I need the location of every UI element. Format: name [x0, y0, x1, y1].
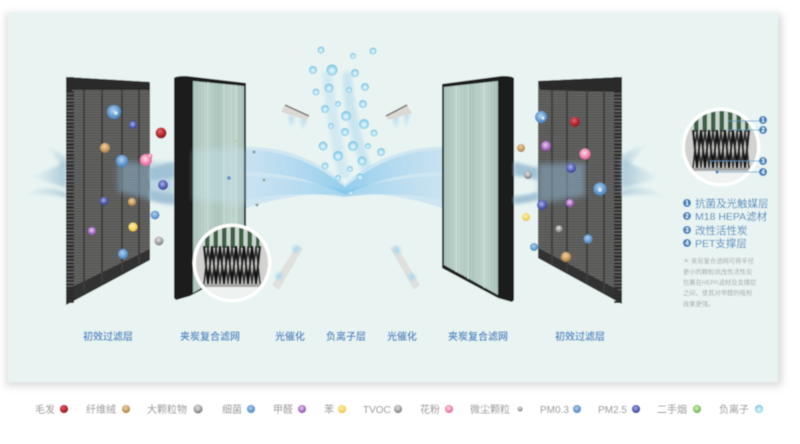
labels: layer names: 负离子层	[326, 330, 366, 343]
legend: particle types: 微尘颗粒	[470, 403, 510, 416]
icon: right pleat cross-section with callouts	[682, 108, 767, 186]
text block: note: ＊ 夹炭复合滤网可将半径	[683, 256, 755, 265]
airflow: right outlet tails	[622, 144, 668, 198]
filter: left primary mesh	[66, 77, 174, 305]
legend: particle types: 毛发	[35, 403, 55, 416]
legend list: filter layers	[683, 197, 768, 250]
text block: note: 效果更强。	[683, 299, 714, 308]
particles: small in left composite	[227, 140, 266, 206]
labels: layer names: 光催化	[387, 330, 417, 343]
text block: note: 更小的颗粒状改性活性炭	[683, 267, 753, 276]
airflow: central wave	[246, 147, 442, 208]
legend: particle types: 苯	[324, 403, 334, 416]
legend list: filter layers: PET支撑层	[695, 237, 747, 250]
legend: particle types: 细菌	[222, 403, 242, 416]
legend: particle types: TVOC	[363, 405, 391, 416]
particles: left side	[88, 105, 168, 259]
icon: upper left photocatalyst lamp	[281, 105, 309, 129]
legend: particle types: 花粉	[420, 403, 440, 416]
legend: particle types: 大颗粒物	[147, 403, 187, 416]
legend: particle types: 纤维绒	[86, 403, 116, 416]
filter: left composite with carbon	[174, 76, 246, 300]
legend list: filter layers: 1	[685, 201, 689, 207]
icon: left pleat cross-section	[192, 224, 272, 302]
text block: note: 包裹在HEPA滤材及支撑层	[683, 278, 756, 286]
legend: particle types: 甲醛	[273, 403, 293, 416]
legend list: filter layers: 抗菌及光触媒层	[695, 197, 768, 210]
legend: particle types: PM0.3	[540, 405, 569, 416]
filter: right composite with carbon	[442, 76, 514, 302]
icon: lower left photocatalyst lamp	[272, 245, 303, 290]
icon: right pleat cross-section with callouts: 3	[761, 159, 765, 165]
legend: particle types: PM2.5	[598, 405, 627, 416]
legend list: filter layers: 4	[685, 241, 689, 247]
airflow: band between left filters	[150, 162, 174, 204]
text block: note: 之间，使其对甲醛的吸附	[683, 288, 753, 297]
airflow: band between right filters	[514, 162, 538, 204]
icon: upper right photocatalyst lamp	[386, 105, 412, 129]
icon: right pleat cross-section with callouts: 1	[761, 118, 765, 124]
legend list: filter layers: 改性活性炭	[695, 224, 748, 237]
legend: particle types: 二手烟	[657, 403, 687, 416]
icon: lower right photocatalyst lamp	[390, 245, 420, 290]
legend: particle types: 负离子	[719, 403, 749, 416]
legend: particle types	[35, 403, 763, 416]
airflow: vertical stream	[322, 72, 372, 178]
labels: layer names	[83, 330, 605, 343]
legend list: filter layers: 2	[685, 214, 689, 220]
icon: right pleat cross-section with callouts: 2	[761, 128, 765, 134]
legend list: filter layers: 3	[685, 228, 689, 234]
labels: layer names: 夹炭复合滤网	[448, 330, 508, 343]
labels: layer names: 初效过滤层	[555, 330, 605, 343]
legend list: filter layers: M18 HEPA滤材	[695, 210, 768, 223]
particles: negative ions	[309, 46, 385, 196]
icon: right pleat cross-section with callouts: 4	[761, 170, 765, 176]
labels: layer names: 夹炭复合滤网	[180, 330, 240, 343]
particles: right side	[517, 111, 606, 262]
text block: note	[683, 256, 756, 308]
filter: right primary mesh	[538, 77, 622, 304]
airflow: left intake tails	[22, 146, 66, 198]
labels: layer names: 光催化	[275, 330, 305, 343]
airflow: pale overlay on left composite	[193, 148, 246, 205]
labels: layer names: 初效过滤层	[83, 330, 133, 343]
